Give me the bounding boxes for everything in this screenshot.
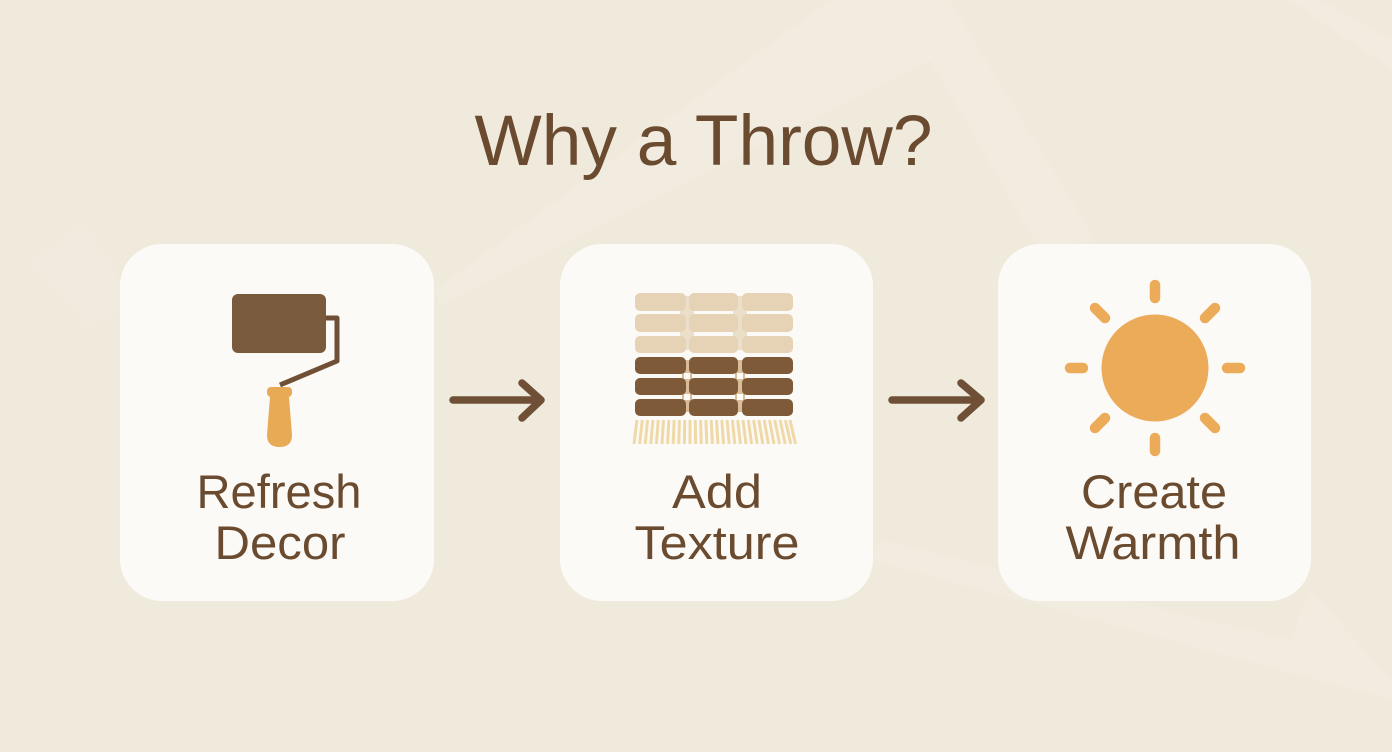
- label: add texture: [634, 465, 800, 569]
- arrow: refresh to texture: [453, 383, 541, 418]
- label: add texture: Texture: [634, 516, 800, 569]
- label: refresh decor: [196, 465, 362, 569]
- label: create warmth: Create: [1081, 465, 1227, 518]
- label: create warmth: Warmth: [1066, 516, 1240, 569]
- panel: refresh decor: [120, 244, 434, 601]
- icon: sun: [1070, 285, 1240, 451]
- label: refresh decor: Decor: [214, 516, 346, 569]
- panel: create warmth: [998, 244, 1311, 601]
- icon: woven throw: [634, 293, 796, 444]
- title: Why a Throw?: [474, 102, 932, 181]
- panel: add texture: [560, 244, 873, 601]
- label: refresh decor: Refresh: [196, 465, 362, 518]
- icon: paint roller: [232, 294, 337, 447]
- label: create warmth: [1066, 465, 1240, 569]
- arrow: texture to warmth: [892, 383, 981, 418]
- label: add texture: Add: [672, 465, 762, 518]
